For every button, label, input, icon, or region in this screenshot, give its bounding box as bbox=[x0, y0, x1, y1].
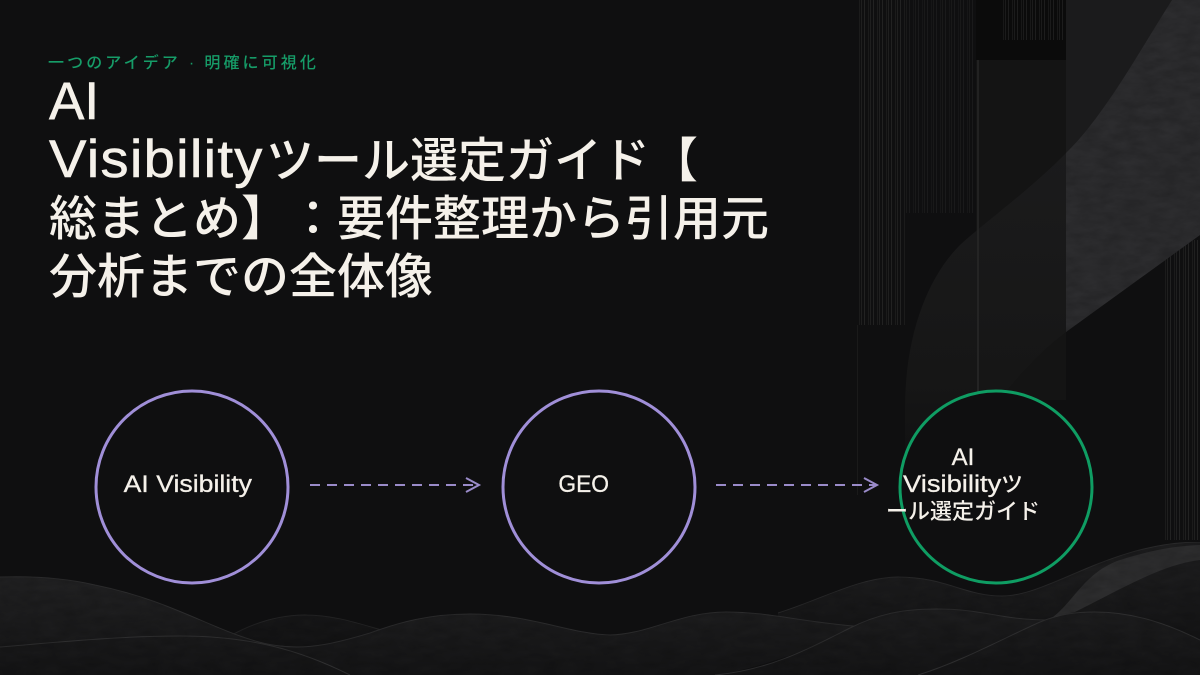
hill left bbox=[0, 577, 300, 675]
hill lower-left bbox=[0, 636, 350, 675]
label: AI Visibility tool guide: ツ bbox=[1001, 472, 1023, 497]
foreground hill bbox=[918, 612, 1200, 675]
arrow 2 bbox=[716, 478, 877, 492]
hill centre-right bbox=[715, 609, 1048, 675]
label: AI Visibility tool guide: AI bbox=[952, 444, 974, 471]
title line 2: Visibility bbox=[49, 130, 264, 189]
label: AI Visibility tool guide bbox=[886, 444, 1040, 524]
title line 3: 総まとめ】：要件整理から引用元 bbox=[49, 193, 769, 246]
circle: AI Visibility bbox=[96, 391, 288, 583]
title line 2: ツール選定ガイド【 bbox=[266, 135, 698, 188]
curved ribbon bbox=[914, 0, 1200, 334]
light ribbon over hills bbox=[1053, 545, 1200, 617]
title line 4: 分析までの全体像 bbox=[49, 251, 433, 304]
label: AI Visibility tool guide: Visibility bbox=[903, 471, 1001, 498]
label: AI Visibility tool guide: ール選定ガイド bbox=[886, 499, 1040, 524]
circle: AI Visibility tool guide bbox=[900, 391, 1092, 583]
hills bbox=[0, 542, 1200, 675]
hill centre bbox=[280, 612, 864, 675]
rear hill right bbox=[778, 542, 1200, 675]
circle: GEO bbox=[503, 391, 695, 583]
label: GEO: GEO bbox=[559, 471, 609, 498]
stripe columns bbox=[857, 0, 1200, 540]
label: AI Visibility: AI Visibility bbox=[124, 471, 252, 498]
title bbox=[48, 72, 769, 304]
arrow 1 bbox=[310, 478, 479, 492]
title line 2 bbox=[48, 130, 698, 189]
tall panels bbox=[976, 0, 1200, 400]
eyebrow: 一つのアイデア · 明確に可視化 bbox=[48, 55, 319, 72]
title line 1: AI bbox=[49, 72, 99, 131]
rear hill middle-left bbox=[230, 615, 385, 675]
